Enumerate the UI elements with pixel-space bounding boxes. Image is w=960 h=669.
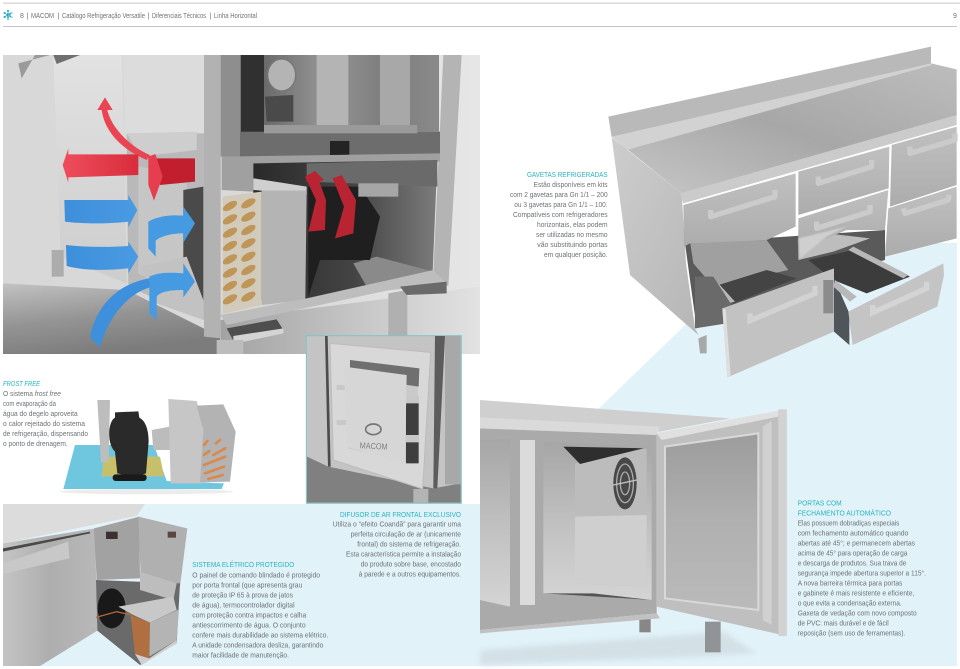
arrow: blue lower intake [66, 242, 138, 273]
breadcrumb text: 8 [20, 13, 24, 20]
text: frost free: de refrigeração, dispensando [3, 429, 88, 438]
arrow: red band right [157, 158, 195, 185]
text: sistema eletrico protegido: antiescorrimento de água. O conjunto [192, 620, 306, 629]
text: sistema eletrico protegido: de água), termocontrolador digital [192, 600, 295, 609]
text: gavetas refrigeradas: em qualquer posição. [544, 250, 608, 259]
worktop [612, 63, 957, 193]
text: difusor de ar frontal exclusivo: perfeita circulação de ar (unicamente [351, 530, 461, 539]
text: portas com fechamento automatico: acima de 45° para operação de carga [798, 548, 908, 557]
open drawer fronts [722, 263, 944, 377]
breadcrumb text: | [58, 13, 60, 20]
base rail and feet [217, 270, 447, 354]
text: portas com fechamento automatico: reposição (sem uso de ferramentas). [798, 628, 905, 637]
text: portas com fechamento automatico [798, 498, 926, 637]
breadcrumb text: Diferenciais Técnicos [152, 13, 206, 20]
text: gavetas refrigeradas: com 2 gavetas para Gn 1/1 – 200 [510, 190, 608, 199]
text: frost free: o calor rejeitado do sistema [3, 419, 86, 428]
text: sistema eletrico protegido [192, 560, 328, 659]
text: portas com fechamento automatico: FECHAMENTO AUTOMÁTICO [798, 508, 891, 518]
breadcrumb text [20, 13, 257, 20]
text: gavetas refrigeradas: Estão disponíveis em kits [534, 180, 608, 189]
page header [3, 3, 960, 26]
breadcrumb text: MACOM [31, 13, 54, 20]
panel: condensing unit image [60, 399, 236, 494]
text: sistema eletrico protegido: de proteção IP 65 à prova de jatos [192, 590, 293, 599]
text: portas com fechamento automatico: de PVC: mais durável e de fácil [798, 618, 889, 627]
door handle [3, 542, 69, 574]
text: portas com fechamento automatico: segurança impede abertura superior a 115°. [798, 568, 926, 577]
text: difusor de ar frontal exclusivo: frontal) do sistema de refrigeração. [357, 540, 461, 549]
breadcrumb text: | [210, 13, 212, 20]
lower compartment [253, 160, 437, 300]
fan grille [613, 457, 637, 509]
text: gavetas refrigeradas: GAVETAS REFRIGERADAS [527, 170, 608, 179]
text: difusor de ar frontal exclusivo: do produto sobre base, encostado [361, 560, 461, 569]
cabinet side [612, 137, 698, 335]
breadcrumb text: Linha Horizontal [214, 13, 257, 20]
arrow: blue large curve [90, 278, 150, 347]
arrow: red up [97, 97, 150, 160]
text: portas com fechamento automatico: e gabinete é mais resistente e eficiente, [798, 588, 914, 597]
breadcrumb text: | [26, 13, 28, 20]
arrows: red over compressor [305, 171, 356, 238]
text: portas com fechamento automatico: com fechamento automático quando [798, 528, 908, 537]
breadcrumb text: | [148, 13, 150, 20]
text: gavetas refrigeradas: Compatíveis com refrigeradores [513, 210, 608, 219]
legs [639, 618, 721, 652]
text: portas com fechamento automatico: PORTAS COM [798, 498, 842, 508]
text: sistema eletrico protegido: O painel de comando blindado é protegido [192, 570, 320, 579]
text: frost free: água do degelo aproveita [3, 409, 78, 418]
arrow: red head down [148, 154, 163, 201]
text: gavetas refrigeradas [510, 170, 608, 259]
text: portas com fechamento automatico: o que evita a condensação externa. [798, 598, 902, 607]
cabinet interior [543, 442, 652, 600]
cabinet front band [680, 115, 957, 203]
text: sistema eletrico protegido: confere mais durabilidade ao sistema elétrico. [192, 630, 328, 639]
page number: 9 [953, 13, 957, 20]
text: sistema eletrico protegido: por porta frontal (que apresenta grau [192, 580, 302, 589]
panel: air-flow cutaway image [3, 55, 480, 354]
breadcrumb text: Catálogo Refrigeração Versatile [62, 13, 145, 20]
text: frost free: O sistema frost free [3, 389, 61, 398]
arrow: blue middle inner [148, 207, 195, 257]
condenser coil [221, 192, 262, 314]
text: portas com fechamento automatico: abertas até 45°; e permanecem abertas [798, 538, 915, 547]
text: frost free: o ponto de drenagem. [3, 439, 68, 448]
open compartments [685, 230, 885, 328]
text: gavetas refrigeradas: vão substituindo portas [537, 240, 608, 249]
icon: snowflake [4, 10, 12, 20]
diffuser frame [330, 343, 431, 489]
text: gavetas refrigeradas: ou 3 gavetas para Gn 1/1 – 100. [514, 200, 608, 209]
panel: refrigerated drawers unit image [608, 47, 957, 377]
text: sistema eletrico protegido: A unidade condensadora desliza, garantindo [192, 640, 323, 649]
white deflector with logo [344, 367, 407, 464]
text: difusor de ar frontal exclusivo: DIFUSOR DE AR FRONTAL EXCLUSIVO [340, 510, 461, 519]
text: gavetas refrigeradas: horizontais, elas podem [537, 220, 608, 229]
text: portas com fechamento automatico: Gaxeta de vedação com novo composto [798, 608, 917, 617]
light blue background panel [3, 243, 957, 666]
text: frost free [3, 379, 88, 448]
panel: self-closing door image [480, 400, 787, 665]
text: gavetas refrigeradas: ser utilizadas no mesmo [536, 230, 608, 239]
arrow: blue upper intake [64, 195, 137, 227]
text: frost free: FROST FREE [3, 379, 41, 388]
compressor [97, 400, 149, 481]
text: difusor de ar frontal exclusivo [333, 510, 462, 579]
panel: protected electrical system image [3, 504, 187, 666]
drawers closed [683, 127, 957, 258]
backsplash [608, 47, 957, 137]
condensing unit [96, 572, 180, 665]
leg [698, 335, 707, 353]
panel: front diffuser inset image [306, 336, 461, 503]
text: sistema eletrico protegido: maior facilidade de manutenção. [192, 650, 289, 659]
white deflector with logo: MACOM [359, 440, 388, 452]
text: sistema eletrico protegido: SISTEMA ELÉTRICO PROTEGIDO [192, 560, 294, 569]
text: difusor de ar frontal exclusivo: Utiliza o “efeito Coandă” para garantir uma [333, 520, 462, 529]
front frame [204, 55, 221, 338]
condenser box [152, 399, 236, 483]
text: portas com fechamento automatico: Elas possuem dobradiças especiais [798, 518, 900, 527]
open door [657, 409, 787, 636]
arrow: blue lower inner [149, 263, 195, 320]
text: portas com fechamento automatico: e descarga de produtos. Sua trava de [798, 558, 906, 567]
text: sistema eletrico protegido: com proteção contra impactos e calha [192, 610, 307, 619]
text: frost free: com evaporação da [3, 399, 57, 408]
text: difusor de ar frontal exclusivo: Esta característica permite a instalação [346, 550, 461, 559]
floor shadow [480, 632, 757, 665]
text: difusor de ar frontal exclusivo: à parede e a outros equipamentos. [359, 570, 461, 579]
cabinet doors [12, 55, 204, 283]
arrow: red left [63, 148, 138, 183]
text: portas com fechamento automatico: A nova barreira térmica para portas [798, 578, 903, 587]
